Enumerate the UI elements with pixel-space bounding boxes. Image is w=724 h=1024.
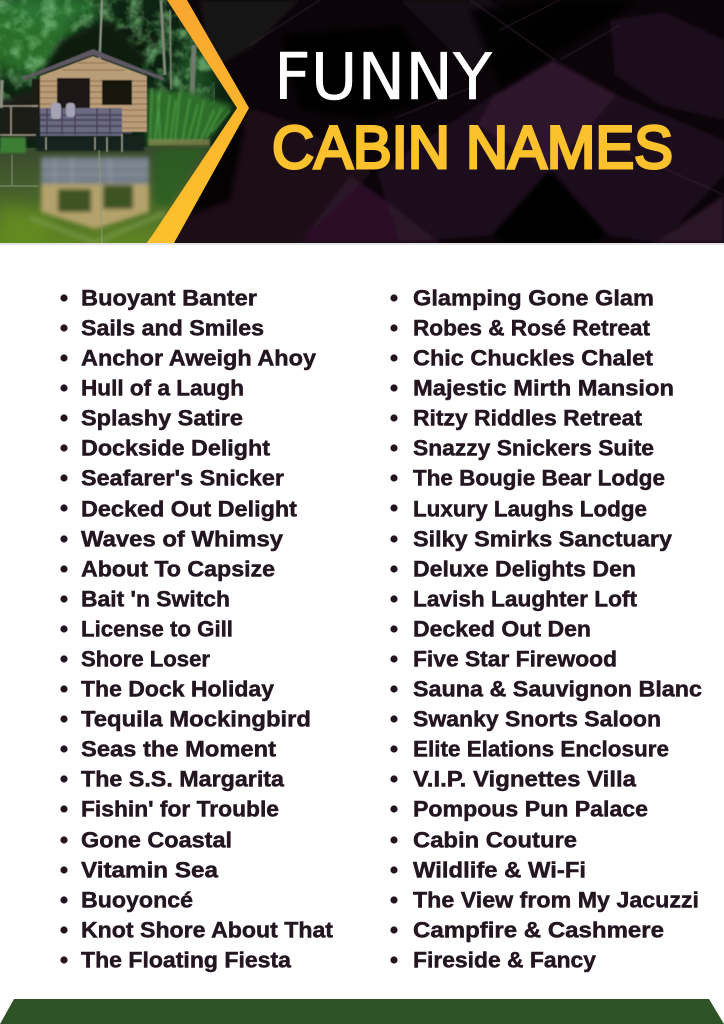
foliage texture: [0, 0, 215, 105]
right column list: V.I.P. Vignettes Villa: [413, 766, 637, 792]
right column list: Luxury Laughs Lodge: [413, 496, 647, 522]
photo: cabin on a lake: [0, 0, 240, 245]
left column list: Tequila Mockingbird: [81, 706, 311, 732]
left column list: Vitamin Sea: [81, 858, 219, 882]
tree trunks: [0, 0, 197, 109]
cabin: [0, 49, 165, 152]
reeds: [147, 90, 232, 146]
right column list: Glamping Gone Glam: [413, 286, 654, 310]
right column list: Snazzy Snickers Suite: [413, 436, 654, 460]
left column list: Buoyant Banter: [81, 286, 257, 310]
left column list: Seafarer's Snicker: [81, 466, 284, 490]
dark recess behind cabin: [0, 90, 40, 140]
header bottom edge: [0, 243, 724, 245]
left column list: Hull of a Laugh: [81, 376, 244, 400]
title line: CABIN NAMES: CABIN NAMES: [272, 114, 673, 181]
left column list: Gone Coastal: [81, 828, 232, 852]
right column list: Fireside & Fancy: [413, 948, 596, 972]
right column list: Ritzy Riddles Retreat: [413, 406, 643, 430]
left column list: About To Capsize: [81, 556, 275, 582]
right column list: Chic Chuckles Chalet: [413, 346, 654, 370]
right column list: [390, 286, 702, 972]
dark geometric background: [150, 0, 724, 243]
left column list: Buoyoncé: [81, 888, 193, 912]
water: [0, 146, 215, 243]
left column list: The Floating Fiesta: [81, 948, 291, 972]
left column list: Knot Shore About That: [81, 918, 334, 942]
right column list: Swanky Snorts Saloon: [413, 706, 661, 732]
right column list: Decked Out Den: [413, 616, 591, 642]
right column list: The Bougie Bear Lodge: [413, 466, 665, 490]
left column list: License to Gill: [81, 616, 233, 642]
left column list: Waves of Whimsy: [81, 526, 284, 552]
right column list: Robes & Rosé Retreat: [413, 316, 650, 340]
forest backdrop: [0, 0, 240, 150]
left column list: Anchor Aweigh Ahoy: [81, 346, 316, 370]
left column list: Decked Out Delight: [81, 496, 298, 522]
right column list: Majestic Mirth Mansion: [413, 376, 674, 400]
left column list: Splashy Satire: [81, 406, 243, 430]
right column list: The View from My Jacuzzi: [413, 888, 699, 912]
yellow chevron: [147, 0, 249, 243]
shoreline foliage: [0, 137, 26, 153]
left column list: Dockside Delight: [81, 436, 271, 460]
left column list: Fishin' for Trouble: [81, 796, 279, 822]
cabin reflection: [30, 157, 165, 245]
header banner: [0, 0, 724, 245]
right column list: Five Star Firewood: [413, 646, 617, 672]
right column list: Silky Smirks Sanctuary: [413, 526, 672, 552]
right column list: Wildlife & Wi-Fi: [413, 858, 586, 882]
deck: [40, 108, 122, 136]
right column list: Lavish Laughter Loft: [413, 586, 638, 612]
right column list: Sauna & Sauvignon Blanc: [413, 676, 702, 702]
left column list: The Dock Holiday: [81, 676, 274, 702]
left column list: Seas the Moment: [81, 736, 277, 762]
facet highlight lines: [250, 0, 724, 195]
left column list: Sails and Smiles: [81, 316, 264, 340]
right column list: Elite Elations Enclosure: [413, 736, 669, 762]
right column list: Deluxe Delights Den: [413, 556, 636, 582]
left column list: Bait 'n Switch: [81, 586, 230, 612]
title line: FUNNY: FUNNY: [274, 41, 493, 115]
right column list: Cabin Couture: [413, 828, 577, 852]
left column list: The S.S. Margarita: [81, 766, 284, 792]
left column list: [60, 286, 334, 972]
right column list: Campfire & Cashmere: [413, 918, 664, 942]
footer green band: [0, 999, 724, 1024]
left column list: Shore Loser: [81, 646, 210, 672]
right column list: Pompous Pun Palace: [413, 796, 648, 822]
